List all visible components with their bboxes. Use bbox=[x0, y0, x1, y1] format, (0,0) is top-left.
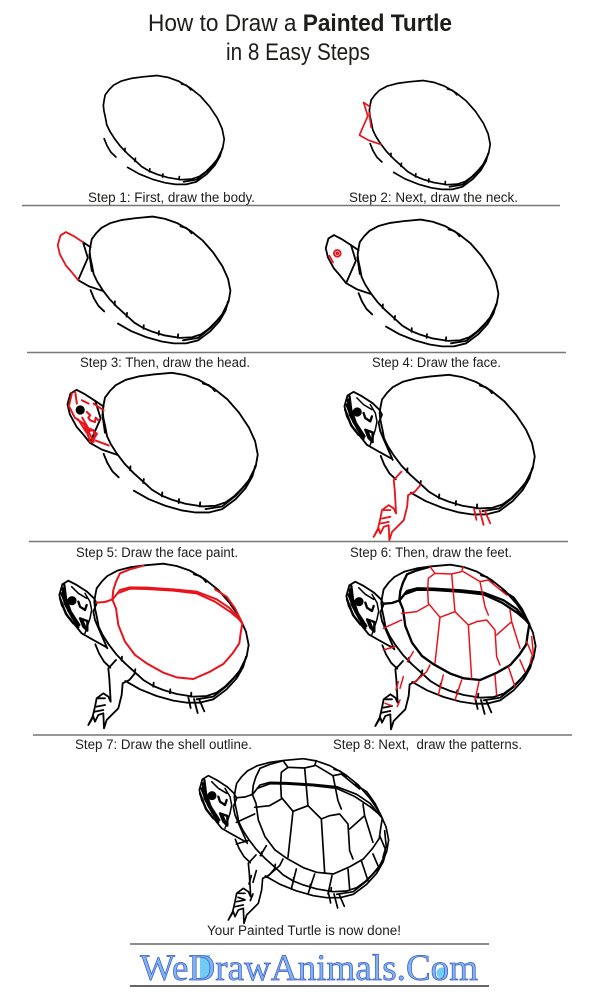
panel: step 3 bbox=[58, 217, 250, 370]
panel: finished turtle bbox=[199, 759, 401, 938]
caption: step 4: Step 4: Draw the face. bbox=[372, 355, 501, 370]
title: in 8 Easy Steps bbox=[226, 39, 370, 66]
caption: step 5: Step 5: Draw the face paint. bbox=[76, 545, 238, 560]
panel: step 5 bbox=[67, 373, 258, 560]
caption: step 7: Step 7: Draw the shell outline. bbox=[75, 737, 252, 752]
panel: step 7 bbox=[59, 564, 252, 752]
drawing: finished turtle bbox=[199, 759, 389, 923]
panel: step 6 bbox=[344, 375, 535, 560]
caption: step 2: Step 2: Next, draw the neck. bbox=[349, 190, 518, 205]
panel: step 8 bbox=[333, 565, 536, 752]
caption: done: Your Painted Turtle is now done! bbox=[207, 923, 401, 938]
caption: step 8: Step 8: Next, draw the patterns. bbox=[333, 737, 522, 752]
panel: step 1 bbox=[88, 76, 255, 205]
drawing: turtle body bbox=[103, 76, 224, 184]
panel: step 2 bbox=[349, 81, 518, 205]
title: How to Draw a Painted Turtle bbox=[148, 10, 452, 37]
caption: step 3: Step 3: Then, draw the head. bbox=[80, 355, 250, 370]
panel: step 4 bbox=[326, 220, 501, 370]
drawing: body with red neck bbox=[359, 81, 490, 189]
drawing: turtle with red face paint bbox=[67, 373, 258, 512]
drawing: turtle with red face bbox=[326, 220, 498, 346]
drawing: turtle with red shell patterns bbox=[346, 565, 536, 729]
drawing: turtle with red shell outline bbox=[59, 564, 249, 728]
logo: WeDrawAnimals.Com: WeDrawAnimals.Com bbox=[140, 948, 478, 989]
title bbox=[148, 10, 452, 66]
caption: step 6: Step 6: Then, draw the feet. bbox=[350, 545, 512, 560]
drawing: turtle with red feet bbox=[344, 375, 535, 540]
caption: step 1: Step 1: First, draw the body. bbox=[88, 190, 255, 205]
drawing: turtle with red head outline bbox=[58, 217, 230, 343]
